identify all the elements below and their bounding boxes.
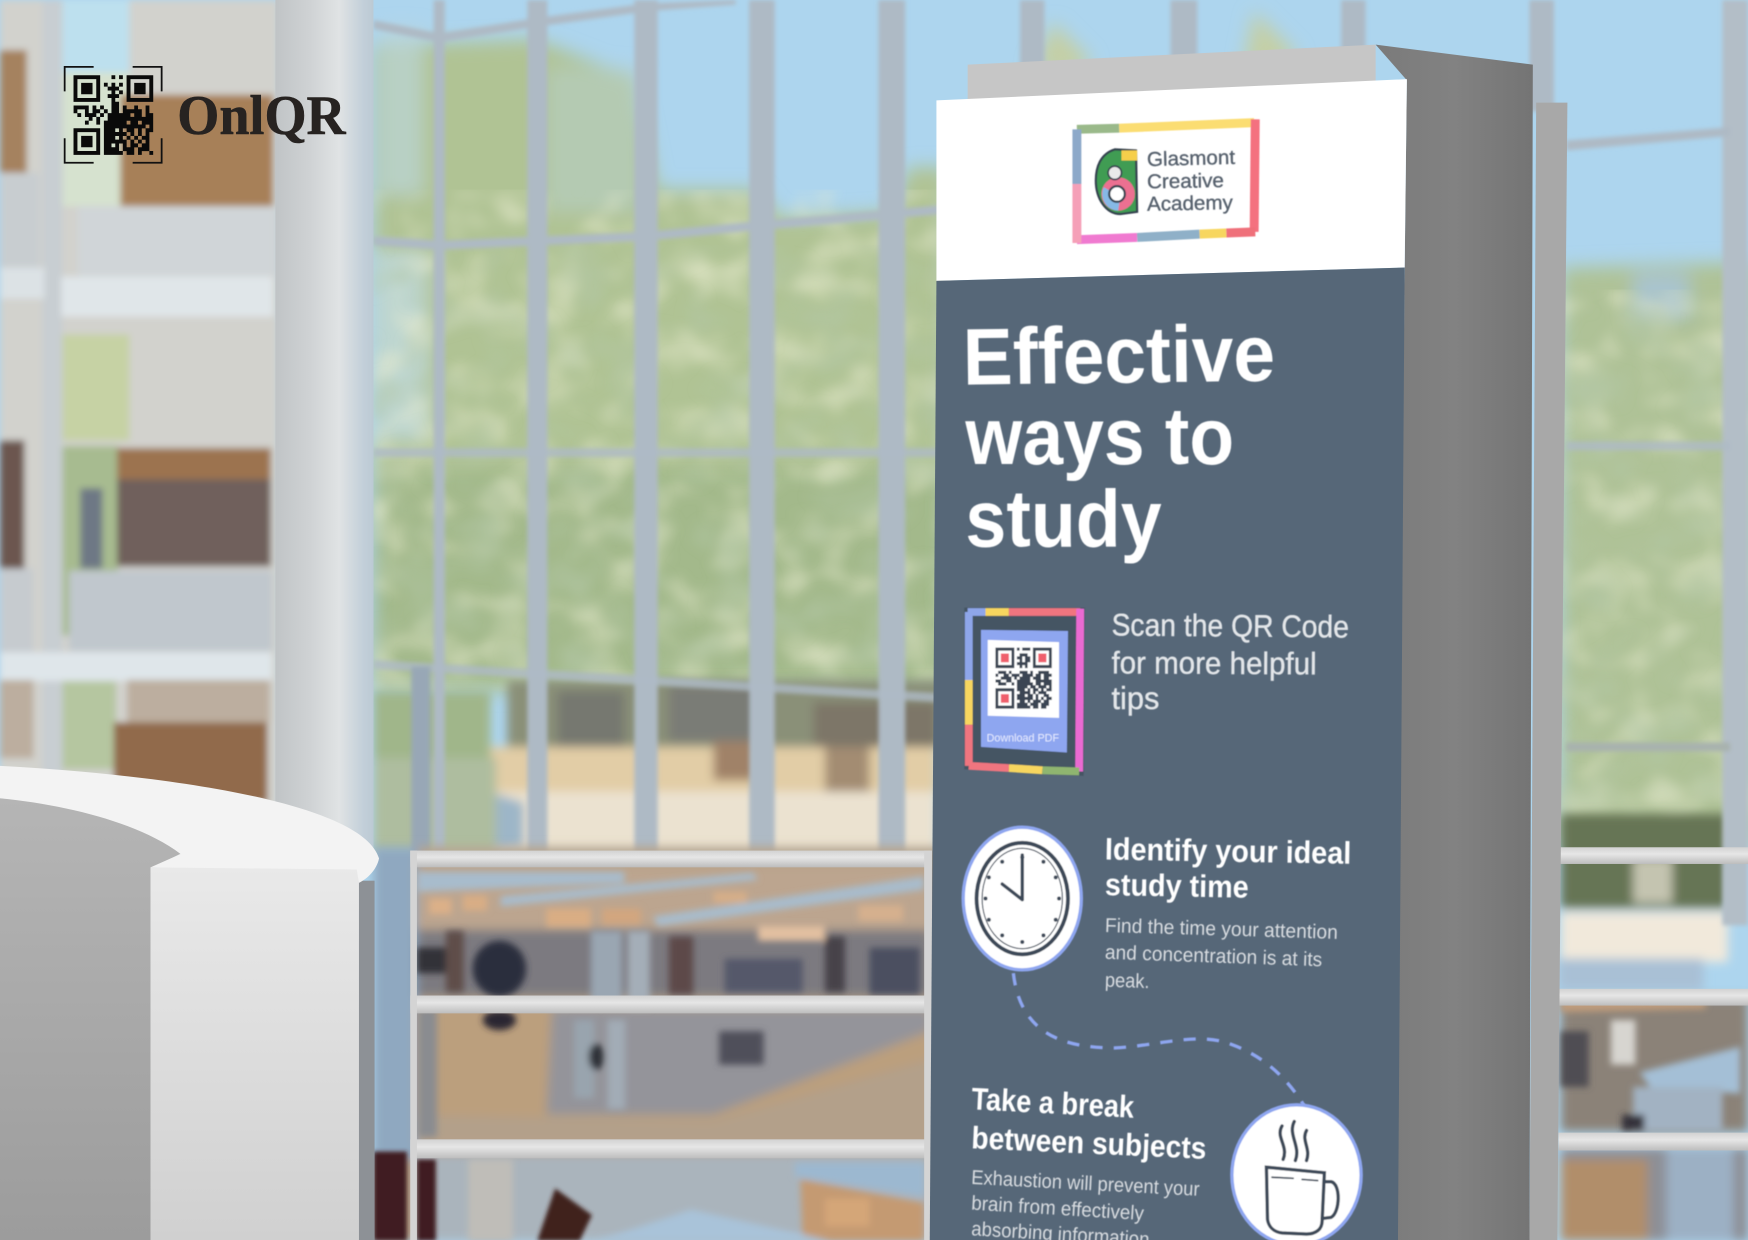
scan instruction text: tips — [1111, 681, 1159, 716]
scan instruction text: for more helpful — [1111, 645, 1317, 681]
background: lower library floor and shelves — [373, 847, 1748, 1240]
QR code graphic — [996, 648, 1052, 709]
scan instruction text: Scan the QR Code — [1111, 607, 1349, 645]
sign panel: slate body — [930, 268, 1405, 1240]
heading and text: ideal study time: study time — [1105, 867, 1249, 905]
signage totem structure — [968, 45, 1567, 1240]
icon: clock — [963, 827, 1081, 970]
heading and text: take a break: Take a break — [971, 1081, 1136, 1125]
logo wordmark — [1147, 147, 1236, 216]
title: study — [965, 474, 1162, 564]
sign panel: white header — [936, 79, 1407, 281]
scan instruction text — [1111, 607, 1349, 716]
title: Effective — [962, 309, 1276, 403]
download label: Download PDF — [987, 732, 1059, 744]
background: courtyard beyond the window — [373, 680, 1728, 990]
brand wordmark: OnlQR — [177, 85, 346, 147]
foreground: white curved counter — [0, 766, 379, 1240]
heading and text: take a break — [971, 1081, 1207, 1240]
background: window mullions — [373, 0, 1748, 925]
heading and text: ideal study time: and concentration is at its — [1105, 942, 1323, 971]
foreground: glass railing — [410, 847, 1748, 1240]
brand: OnlQR logo — [65, 67, 346, 163]
heading and text: ideal study time — [1105, 832, 1352, 993]
heading and text: take a break: Exhaustion will prevent your — [971, 1167, 1200, 1201]
logo mark — [1096, 149, 1137, 214]
title — [962, 309, 1276, 564]
icon: coffee cup — [1232, 1105, 1361, 1240]
QR code poster — [964, 608, 1085, 776]
heading and text: take a break: between subjects — [971, 1120, 1207, 1166]
heading and text: ideal study time: peak. — [1105, 970, 1150, 993]
heading and text: take a break: brain from effectively — [971, 1193, 1144, 1225]
logo wordmark: Academy — [1147, 192, 1233, 216]
title: ways to — [965, 392, 1234, 482]
brand QR code — [65, 67, 162, 163]
logo wordmark: Glasmont — [1147, 147, 1236, 171]
heading and text: ideal study time: Identify your ideal — [1105, 832, 1352, 871]
dashed connector arrow — [1013, 973, 1304, 1106]
background: left book balconies — [0, 0, 373, 858]
heading and text: ideal study time: Find the time your attention — [1105, 915, 1338, 944]
logo: Glasmont Creative Academy — [1072, 118, 1261, 243]
logo wordmark: Creative — [1147, 170, 1224, 193]
